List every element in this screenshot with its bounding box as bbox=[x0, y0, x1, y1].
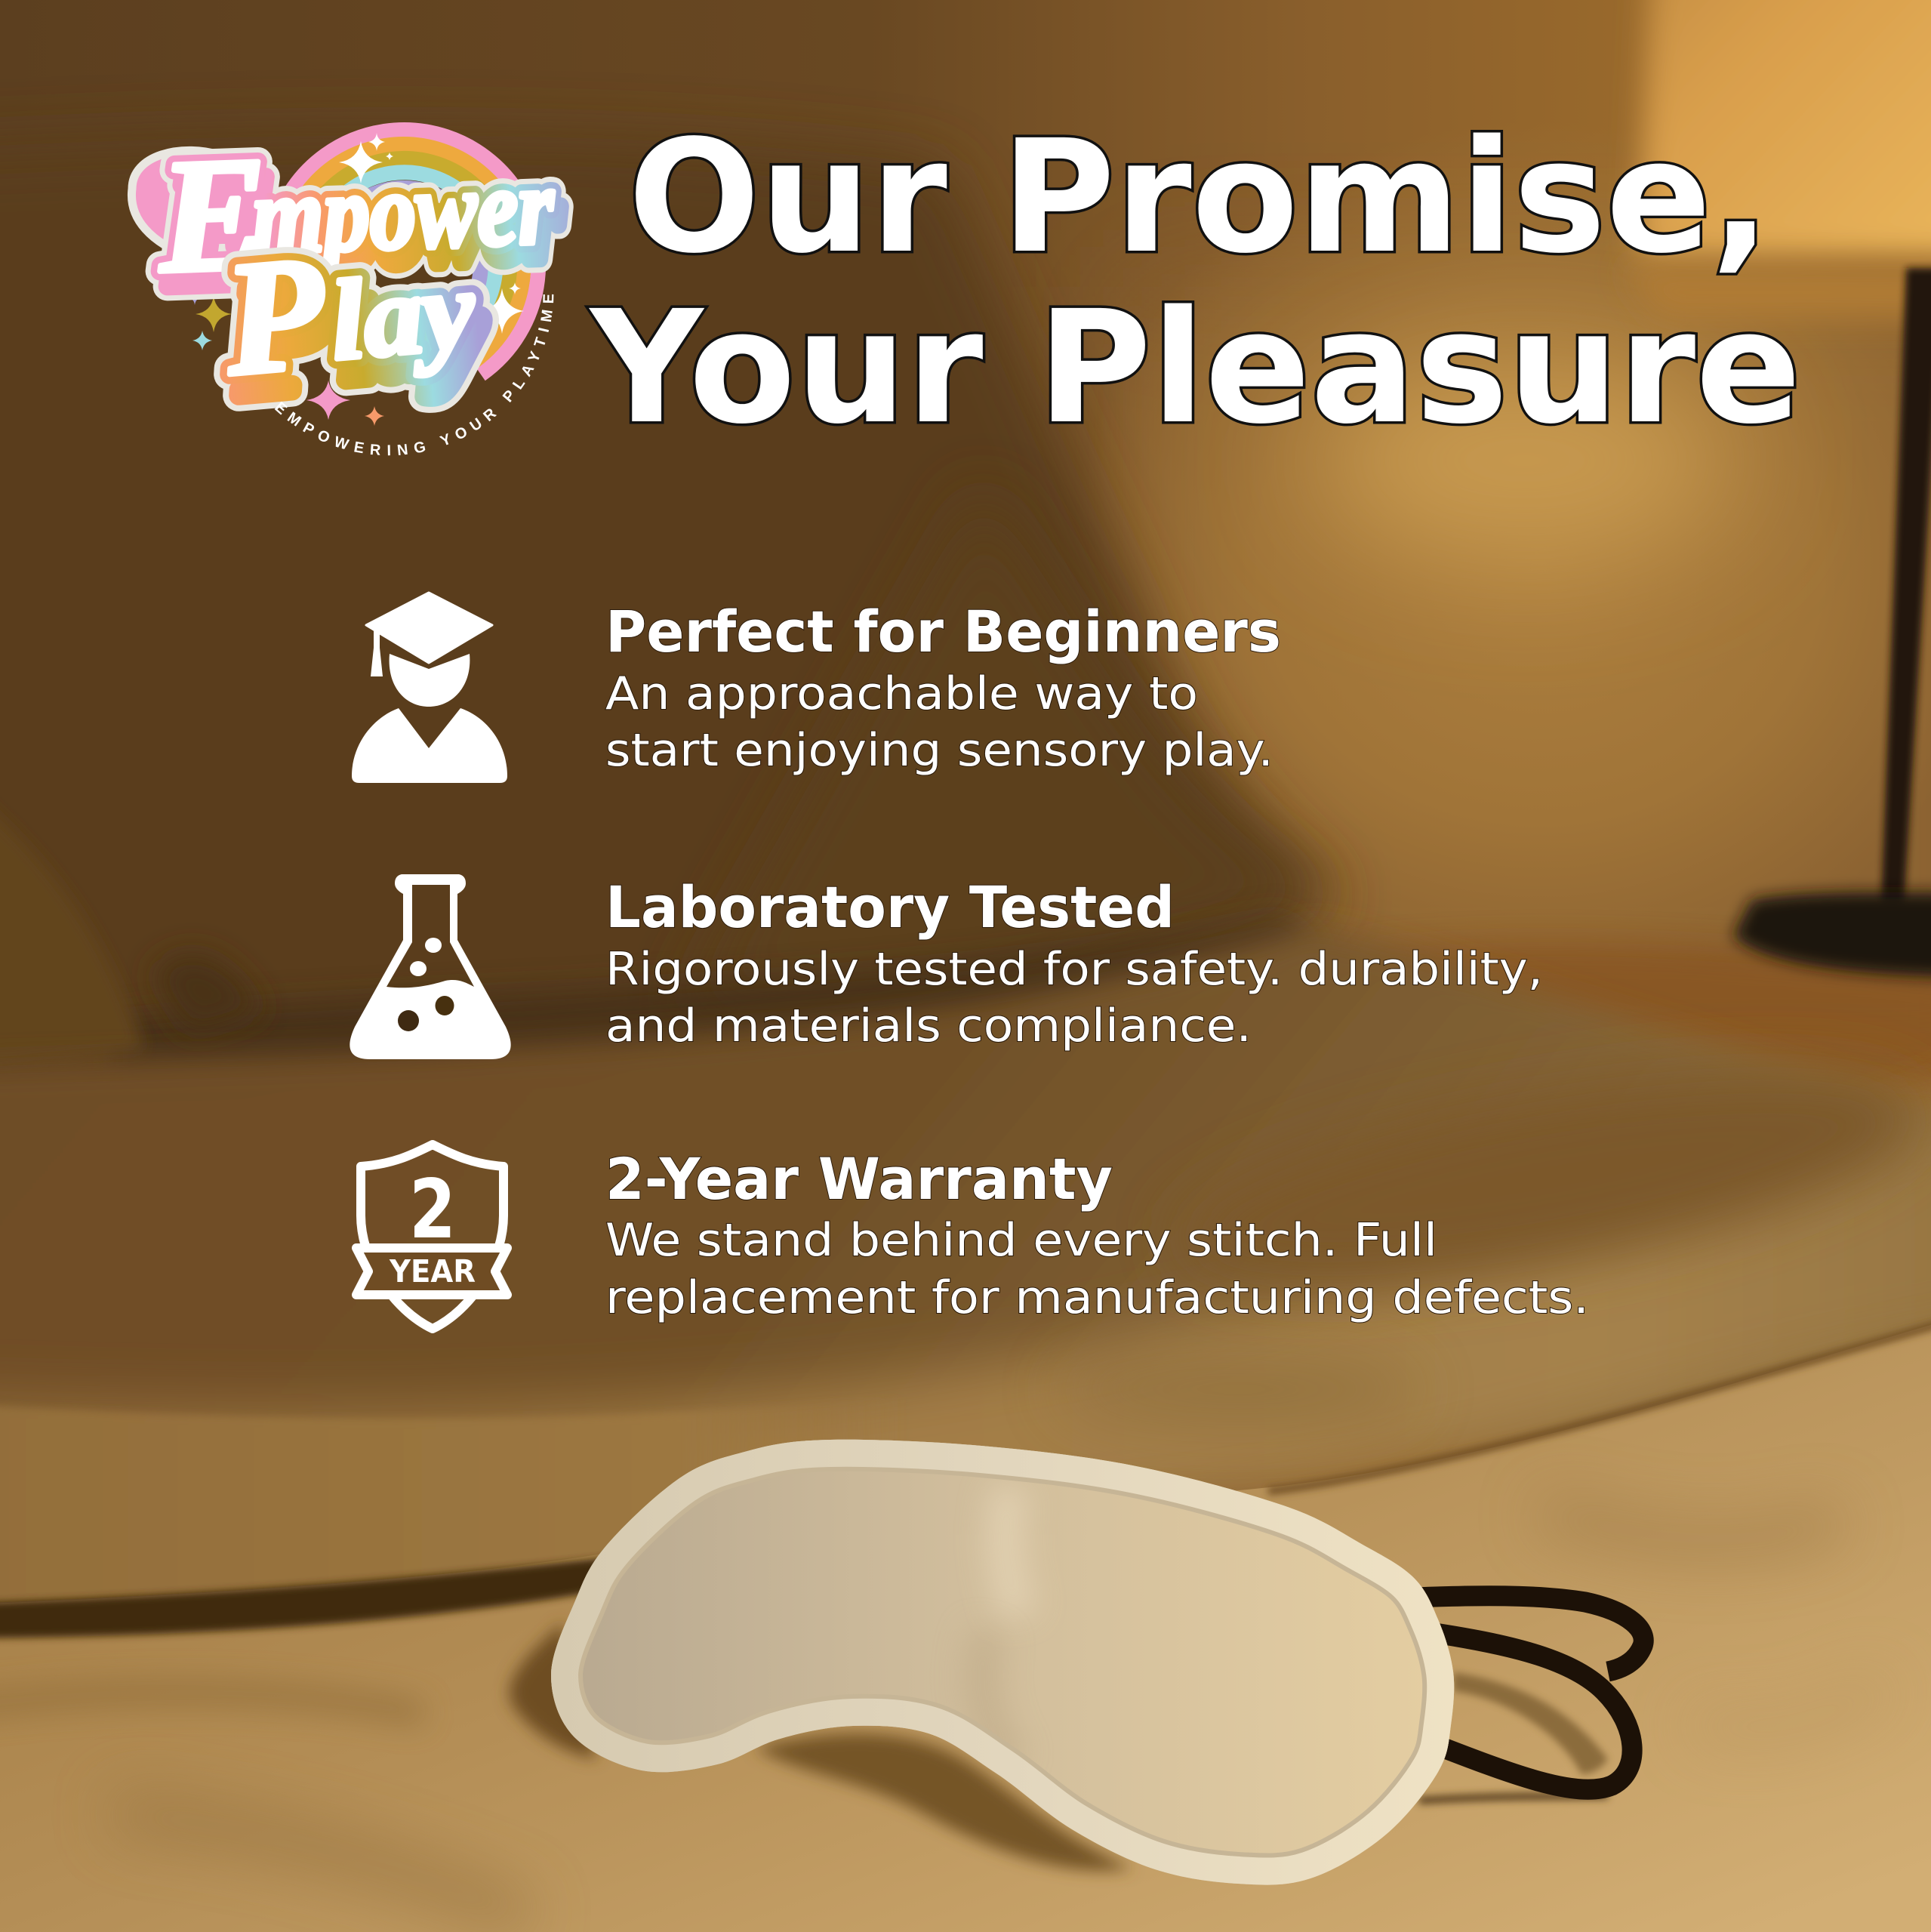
logo wordmark Empower: E bbox=[155, 122, 270, 307]
logo wordmark Empower: mpower bbox=[257, 161, 565, 292]
logo wordmark Empower: mpower bbox=[250, 146, 557, 277]
logo wordmark Play: P bbox=[217, 221, 333, 410]
logo wordmark Empower: mpower bbox=[250, 146, 557, 277]
logo wordmark Play: lay bbox=[334, 267, 490, 405]
icon: 2-year warranty shield: YEAR bbox=[389, 1253, 476, 1290]
logo wordmark Play: P bbox=[217, 221, 333, 410]
sleep mask product bbox=[528, 1427, 1643, 1895]
rainbow arc bbox=[288, 130, 538, 374]
title bbox=[588, 106, 1801, 458]
logo wordmark Play bbox=[217, 208, 491, 431]
text block: Laboratory Tested: and materials compliance. bbox=[605, 1000, 1252, 1052]
text block: Perfect for Beginners: An approachable way to bbox=[605, 667, 1198, 720]
logo wordmark Play: P bbox=[217, 221, 333, 410]
logo wordmark Empower: E bbox=[155, 122, 270, 307]
mask body bbox=[528, 1427, 1480, 1895]
icon: graduate bbox=[352, 593, 507, 783]
logo wordmark Empower: mpower bbox=[257, 161, 565, 292]
elastic straps bbox=[1397, 1596, 1643, 1789]
icon: 2-year warranty shield: 2 bbox=[409, 1163, 456, 1257]
icon: 2-year warranty shield bbox=[356, 1145, 507, 1329]
text block: Laboratory Tested: Laboratory Tested bbox=[605, 874, 1175, 941]
logo wordmark Empower: E bbox=[162, 137, 278, 322]
title: Your Pleasure bbox=[588, 277, 1801, 458]
logo tagline: EMPOWERING YOUR PLAYTIME bbox=[275, 294, 554, 456]
logo wordmark Empower: mpower bbox=[250, 146, 557, 277]
logo pink blob behind E bbox=[131, 150, 283, 288]
logo wordmark Play: lay bbox=[334, 267, 490, 405]
text block: Laboratory Tested bbox=[605, 874, 1543, 1052]
logo wordmark Play: lay bbox=[325, 246, 481, 384]
strap shadows bbox=[1419, 1672, 1608, 1801]
title: Our Promise, bbox=[628, 106, 1770, 288]
text block: 2-Year Warranty: replacement for manufacturing defects. bbox=[605, 1271, 1589, 1324]
logo wordmark Play: lay bbox=[325, 246, 481, 384]
logo wordmark Empower bbox=[155, 112, 565, 322]
logo wordmark Empower: E bbox=[155, 122, 270, 307]
text block: Laboratory Tested: Rigorously tested for safety. durability, bbox=[605, 943, 1543, 996]
text block: Perfect for Beginners: Perfect for Beginners bbox=[605, 598, 1281, 665]
text block: 2-Year Warranty: 2-Year Warranty bbox=[605, 1145, 1113, 1213]
logo wordmark Empower: E bbox=[162, 137, 278, 322]
logo wordmark Play: lay bbox=[325, 246, 481, 384]
text block: 2-Year Warranty bbox=[605, 1145, 1589, 1324]
text block: 2-Year Warranty: We stand behind every stitch. Full bbox=[605, 1214, 1437, 1267]
sparkles bbox=[187, 133, 524, 426]
logo: Empower Play bbox=[127, 122, 574, 456]
mask cast shadows bbox=[755, 1733, 1132, 1871]
text block: Perfect for Beginners bbox=[605, 598, 1281, 777]
text block: Perfect for Beginners: start enjoying sensory play. bbox=[605, 724, 1273, 777]
logo wordmark Play: P bbox=[226, 242, 342, 431]
logo wordmark Play: P bbox=[226, 242, 342, 431]
icon: lab flask bbox=[350, 874, 511, 1059]
